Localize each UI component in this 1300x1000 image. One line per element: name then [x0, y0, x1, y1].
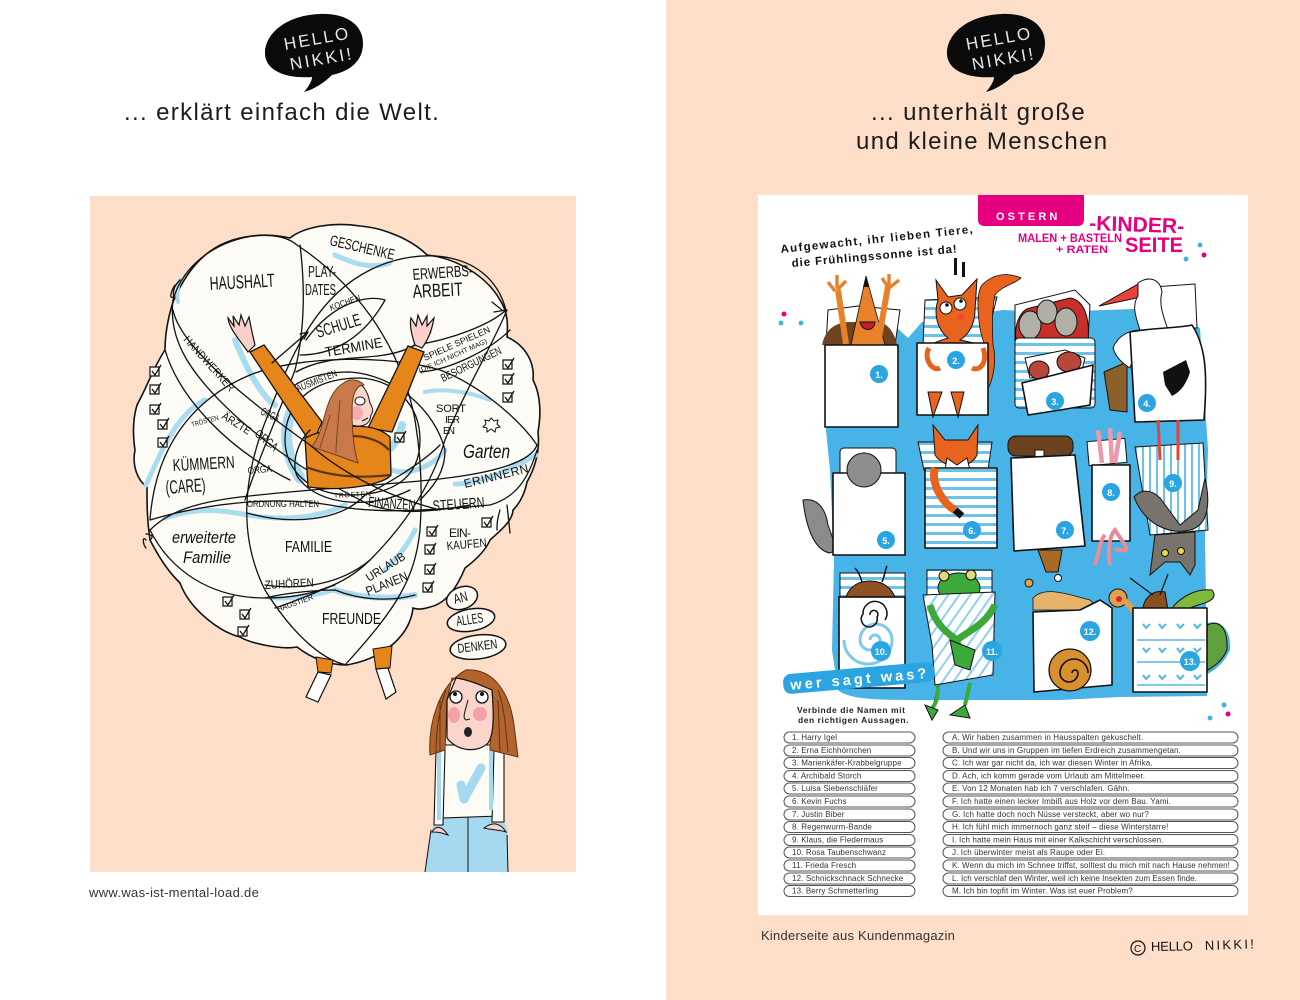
tangled woman [228, 315, 434, 489]
name list: 6. Kevin Fuchs [792, 797, 847, 806]
logo: Hello Nikki speech bubble (left): NIKKI! [288, 44, 353, 74]
name list: 12. Schnickschnack Schnecke [792, 874, 904, 883]
title: Kinderseite: + RATEN [1056, 244, 1108, 256]
hand-lettered topic labels [165, 232, 530, 628]
name list: 13. Berry Schmetterling [792, 886, 878, 896]
hand-lettered topic labels: EN [443, 426, 455, 437]
bed 2: squirrel [917, 258, 1021, 417]
hand-lettered topic labels: ORGA [247, 464, 272, 477]
heading: explains the world: ... erklärt einfach die Welt. [124, 99, 440, 126]
hand-lettered topic labels: STEUERN [432, 494, 485, 515]
hand-lettered topic labels: ORDNUNG HALTEN [247, 499, 319, 509]
hand-lettered topic labels: PLANEN [364, 568, 410, 599]
tab: Ostern [978, 195, 1084, 226]
copyright signature: HELLO [1151, 938, 1193, 954]
statement list: B. Und wir uns in Gruppen im tiefen Erdreich zusammengetan. [952, 746, 1181, 755]
bed 9: bat: 9. [1169, 479, 1177, 489]
statement list: M. Ich bin topfit im Winter. Was ist euer Problem? [952, 886, 1133, 896]
copyright signature: C [1134, 944, 1141, 955]
woman thinking [425, 670, 518, 872]
copyright signature: NIKKI! [1205, 936, 1254, 953]
hand-lettered topic labels: SPIELE SPIELEN [422, 324, 492, 363]
bed 8: earthworm gang [1087, 428, 1130, 565]
bed 7: beaver [1008, 436, 1085, 572]
bed 3: ladybird group [1015, 290, 1095, 415]
bed 10: butterfly cocoon: 10. [875, 647, 887, 657]
bed 7: beaver: 7. [1061, 526, 1069, 536]
hand-lettered topic labels: FINANZEN [368, 494, 416, 514]
statement list: H. Ich fühl mich immernoch ganz steif – diese Winterstarre! [952, 822, 1168, 832]
name list: 5. Luisa Siebenschläfer [792, 784, 878, 793]
name list: 4. Archibald Storch [792, 772, 861, 780]
heading: entertains big and small people: und kleine Menschen [856, 128, 1108, 155]
hand-lettered topic labels: HAUSHALT [209, 271, 275, 295]
instruction text [797, 705, 909, 725]
thought bubbles: an alles denken: ALLES [455, 609, 484, 629]
bed 2: squirrel: 2. [952, 356, 960, 366]
hand-lettered topic labels: ORGA [259, 406, 281, 425]
tab: Ostern: OSTERN [996, 211, 1060, 223]
statement list: A. Wir haben zusammen in Hausspalten gekuschelt. [952, 733, 1143, 742]
hand-lettered topic labels: URLAUB [363, 549, 408, 585]
hand-lettered topic labels: AUSMISTEN [295, 368, 339, 395]
name list: 3. Marienkäfer-Krabbelgruppe [792, 758, 902, 768]
thought bubbles: an alles denken: AN [452, 588, 469, 607]
hand-lettered topic labels: KOCHEN [328, 293, 362, 313]
bed 8: earthworm gang: 8. [1107, 488, 1115, 498]
bed 4: stork [1099, 279, 1206, 422]
instruction text: Verbinde die Namen mit [797, 705, 905, 715]
title: Kinderseite [1018, 212, 1185, 257]
hand-lettered topic labels: DATES [305, 282, 336, 299]
name list: 1. Harry Igel [792, 733, 837, 742]
bed 13: caterpillar, lizard [1109, 574, 1227, 692]
bed 9: bat [1134, 420, 1208, 575]
hand-lettered topic labels: ORGA [252, 427, 281, 454]
instruction text: den richtigen Aussagen. [798, 715, 909, 725]
heading: entertains big and small people [856, 99, 1108, 155]
caption: children's page: Kinderseite aus Kundenmagazin [761, 928, 955, 943]
right page background [666, 0, 1300, 1000]
blue shadows [146, 255, 536, 598]
bed 1: hedgehog: 1. [875, 370, 883, 380]
hand-lettered topic labels: (CARE) [165, 475, 206, 499]
name list: 8. Regenwurm-Bande [792, 822, 872, 832]
hand-lettered topic labels: HANDWERKER [181, 334, 237, 394]
hand-lettered topic labels: KÜMMERN [172, 453, 235, 475]
heading: Aufgewacht: die Frühlingssonne ist da! [791, 244, 958, 270]
bed 11: frog [923, 570, 1002, 720]
bed 3: ladybird group: 3. [1051, 397, 1059, 407]
panel: mental load illustration [90, 196, 576, 872]
logo: Hello Nikki speech bubble (right): NIKKI! [970, 44, 1035, 74]
name list: 11. Frieda Fresch [792, 861, 856, 870]
statement list: E. Von 12 Monaten hab ich 7 verschlafen. Gähn. [952, 784, 1130, 793]
hand-lettered topic labels: FAMILIE [285, 539, 332, 556]
statement list: G. Ich hatte doch noch Nüsse versteckt, aber wo nur? [952, 810, 1149, 819]
hand-lettered topic labels: ÄRZTE [219, 410, 253, 438]
title: Kinderseite: MALEN + BASTELN [1018, 231, 1122, 245]
logo: Hello Nikki speech bubble (left) [265, 14, 363, 92]
bed 1: hedgehog [822, 274, 900, 427]
checkboxes [150, 358, 514, 636]
blue background shape [825, 308, 1208, 700]
bed 11: frog: 11. [986, 647, 998, 657]
legs of tangled woman [306, 646, 396, 702]
title: Kinderseite: -KINDER- [1089, 212, 1185, 238]
hand-lettered topic labels: BESORGUNGEN [439, 345, 504, 385]
bed 6: fox: 6. [968, 526, 976, 536]
bed 5: dormouse: 5. [882, 536, 890, 546]
hand-lettered topic labels: PLAY- [308, 264, 336, 281]
name list: 10. Rosa Taubenschwanz [792, 848, 886, 857]
hand-lettered topic labels: TERMINE [324, 334, 384, 360]
statement list: D. Ach, ich komm gerade vom Urlaub am Mittelmeer. [952, 772, 1145, 780]
thought bubbles: an alles denken [443, 582, 507, 662]
thought cloud [134, 224, 540, 665]
hand-lettered topic labels: SCHULE [314, 310, 363, 342]
statement list: J. Ich überwinter meist als Raupe oder Ei. [952, 848, 1105, 857]
statement list [943, 732, 1238, 896]
thought bubbles: an alles denken: DENKEN [457, 636, 498, 656]
logo: Hello Nikki speech bubble (left): HELLO [282, 24, 350, 54]
statement list: I. Ich hatte mein Haus mit einer Kalkschicht verschlossen. [952, 836, 1164, 844]
heading: Aufgewacht: Aufgewacht, ihr lieben Tiere, [780, 224, 973, 256]
title: Kinderseite: SEITE [1125, 234, 1183, 257]
banner: wer sagt was: wer sagt was? [789, 666, 930, 694]
hand-lettered topic labels: KAUFEN [446, 536, 487, 553]
copyright signature [1131, 936, 1254, 955]
bed 10: butterfly cocoon [839, 566, 905, 688]
statement list: K. Wenn du mich im Schnee triffst, solltest du mich mit nach Hause nehmen! [952, 861, 1230, 870]
bed 5: dormouse [803, 448, 905, 555]
hand-lettered topic labels: SORT [436, 403, 466, 415]
bed 4: stork: 4. [1143, 399, 1151, 409]
logo: Hello Nikki speech bubble (right): HELLO [964, 24, 1032, 54]
hand-lettered topic labels: TRÖSTEN [190, 414, 220, 429]
hand-lettered topic labels: GESCHENKE [328, 232, 396, 264]
hand-lettered topic labels: ERINNERN [462, 461, 530, 491]
statement list: C. Ich war gar nicht da, ich war diesen Winter in Afrika. [952, 758, 1153, 768]
caption: website: www.was-ist-mental-load.de [88, 885, 259, 900]
hand-lettered topic labels: IER [445, 415, 460, 426]
bed 12: snail [1025, 574, 1112, 692]
hand-lettered topic labels: ARBEIT [412, 279, 463, 303]
bed 6: fox [918, 425, 997, 548]
decorative dots [779, 243, 1230, 720]
hand-lettered topic labels: Familie [183, 548, 231, 567]
logo: Hello Nikki speech bubble (right) [947, 14, 1045, 92]
heading: entertains big and small people: ... unterhält große [871, 99, 1086, 126]
statement list: F. Ich hatte einen lecker Imbiß aus Holz vor dem Bau. Yami. [952, 797, 1171, 806]
hand-lettered topic labels: (DIE ICH NICHT MAG) [418, 338, 488, 375]
statement list: L. Ich verschlaf den Winter, weil ich keine Insekten zum Essen finde. [952, 874, 1197, 883]
panel: children's page [758, 195, 1248, 915]
hand-lettered topic labels: ERWERBS- [412, 263, 473, 284]
name list [784, 732, 915, 896]
heading: Aufgewacht [780, 224, 973, 270]
bed 13: caterpillar, lizard: 13. [1184, 657, 1196, 667]
hand-lettered topic labels: FREUNDE [322, 611, 381, 628]
bed 12: snail: 12. [1084, 627, 1096, 637]
icon: flower [483, 418, 500, 432]
ribbons behind the woman [150, 235, 537, 665]
name list: 2. Erna Eichhörnchen [792, 746, 871, 755]
hand-lettered topic labels: ZUHÖREN [264, 575, 314, 592]
hand-lettered topic labels: TRÖSTEN [334, 490, 371, 500]
hand-lettered topic labels: HAUSTIER [276, 592, 315, 614]
name list: 7. Justin Biber [792, 810, 845, 819]
hand-lettered topic labels: Garten [463, 442, 510, 463]
hand-lettered topic labels: erweiterte [172, 528, 236, 547]
ribbons across the woman [143, 280, 510, 548]
name list: 9. Klaus, die Fledermaus [792, 836, 883, 844]
hand-lettered topic labels: EIN- [449, 526, 471, 540]
